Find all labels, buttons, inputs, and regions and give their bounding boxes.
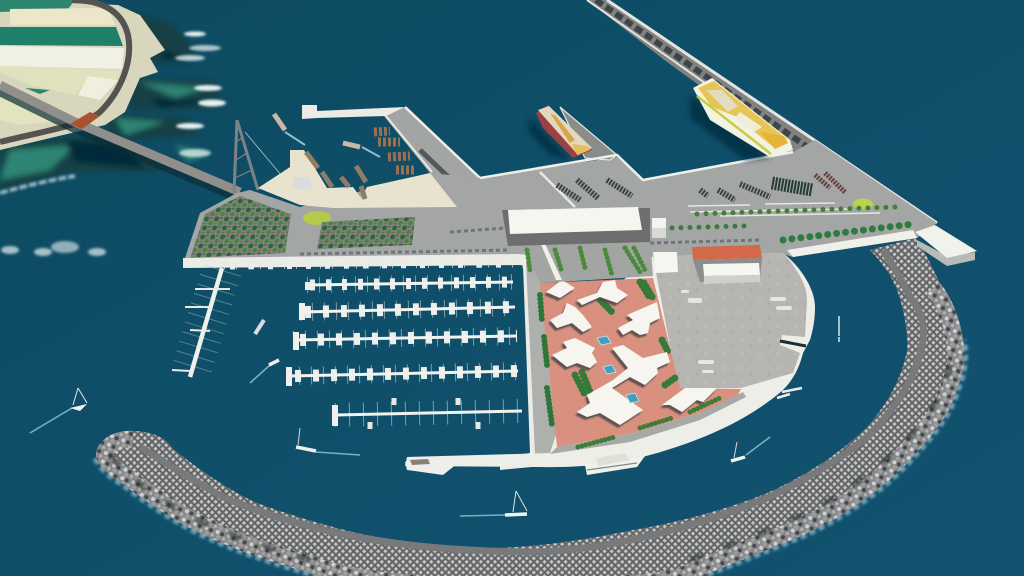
pontoon row 5 [286,367,518,386]
sailboat right [731,437,770,461]
building cross A [577,280,628,305]
shed [293,177,311,189]
boat in basin [274,114,360,147]
yellow ferry [690,78,793,160]
field stripes [0,0,75,12]
plaza boats [681,290,792,373]
middle park [317,217,415,249]
decks [538,106,592,155]
lower gray border [550,392,746,454]
white promenade [787,230,917,257]
hull [536,105,592,158]
land road [0,0,129,142]
top building [546,280,575,298]
pools [597,336,639,403]
white yacht lower left [405,457,458,475]
marina pontoons [172,264,522,429]
ferry shadow [528,118,570,160]
seawall notch [780,341,806,346]
pontoon row 6 [332,398,522,429]
lattice armour band [96,238,965,576]
angled left pontoon [172,268,230,377]
building cross D [552,338,597,368]
building F [662,388,717,412]
ferry shadow [690,95,770,160]
small motor boat [255,320,264,334]
pontoon row 3 [299,303,515,320]
white hall [703,263,760,276]
pink courtyard area [540,278,741,447]
anchored yacht [838,316,840,342]
sailboat left [30,388,87,433]
decks [698,81,787,146]
plaza apron [653,253,807,388]
sailboat with wake [296,428,360,455]
white yacht lower centre [585,453,645,475]
causeway bridge [0,90,240,197]
beach [0,0,165,150]
surf foam [96,340,965,576]
moored boats [306,152,366,199]
marina wall [183,254,557,470]
ferry berth structures [480,107,880,216]
foam patches [1,32,226,256]
moored boats at seawall [777,388,802,398]
curved seawall [405,253,815,467]
upper quay details [274,114,415,225]
crown road [140,250,923,552]
white quay apron [258,150,457,208]
red ferry [528,105,592,160]
parked vehicles [557,173,845,200]
small service building [652,218,666,238]
dark rock patches [110,365,950,562]
courtyard buildings [546,280,717,425]
fishing boats [374,131,415,170]
pontoon row 2 [305,282,513,290]
upper fishing dock [302,105,480,192]
sailing boats and wakes [30,316,839,516]
passenger terminal [502,207,650,246]
coastline and land [0,0,240,256]
small pier [560,107,617,160]
pontoon row 1 [224,264,513,267]
helipad circle [303,211,331,225]
hull [693,78,793,157]
building cross B [550,303,592,332]
red roof building [692,245,762,284]
wakes [285,132,380,157]
garden between terminal and courtyard [520,235,653,283]
parks with trees [190,196,917,258]
outer rock armour [96,283,965,576]
white shed [653,252,678,273]
speedboat with wake [250,365,270,383]
lane markings [688,203,880,216]
green circle [853,198,873,210]
shallow water along coast [0,10,222,190]
long ferry jetty [587,0,937,226]
central roads cars [300,228,760,254]
tree rows [672,207,913,240]
covered walkway [537,235,562,280]
wall of ferry quay [480,152,793,180]
end block of the breakwater [915,225,977,266]
main platform roadway [183,140,937,300]
orange junction [70,112,100,129]
sail mast bridge pylon [234,120,282,193]
pontoon row 4 [293,332,517,350]
building C [618,302,660,335]
sailboat bottom [460,491,527,516]
long building E [577,345,670,425]
breakwater arc [96,238,965,576]
courtyard trees [540,282,720,447]
offshore surf line [0,176,75,193]
left park [190,196,291,258]
